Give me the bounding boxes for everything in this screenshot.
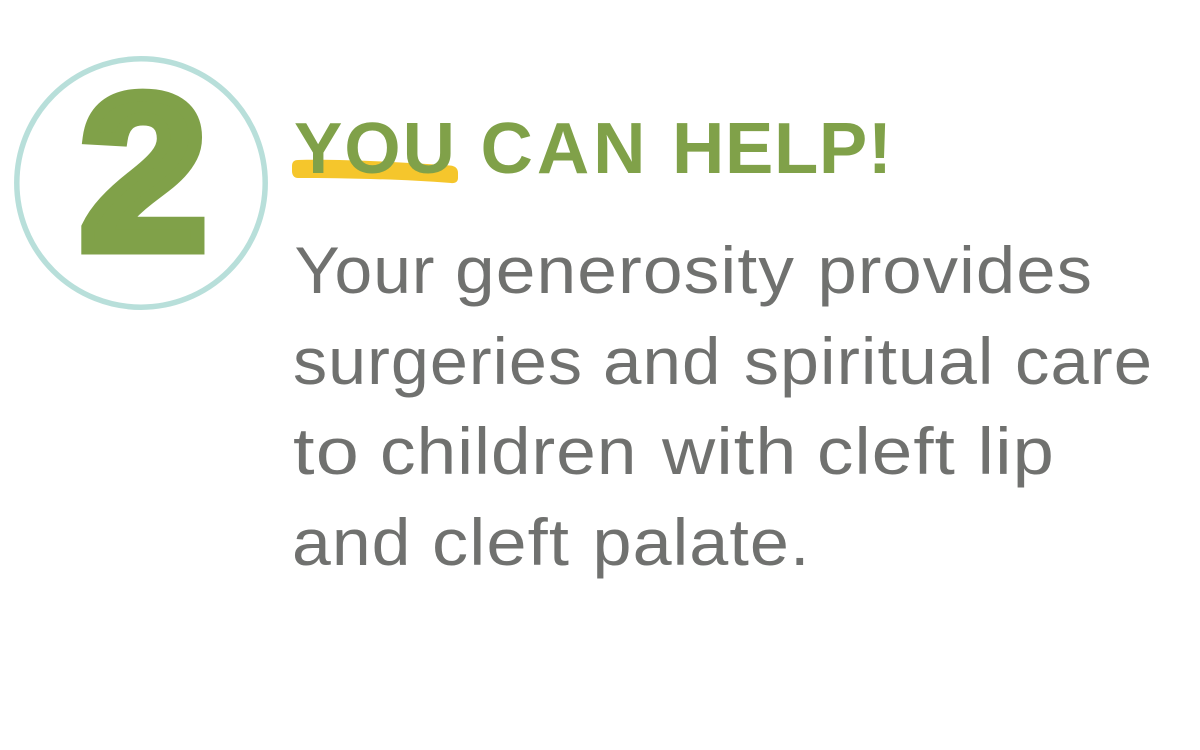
line 4: palate. xyxy=(592,505,810,579)
line 1: provides xyxy=(818,233,1093,307)
line 1: Your xyxy=(294,233,436,307)
line 3: children xyxy=(380,414,638,488)
heading text xyxy=(294,108,892,189)
line 1 xyxy=(294,233,1093,307)
line 3: with xyxy=(661,414,798,488)
line 2 xyxy=(293,324,1153,398)
number badge xyxy=(17,51,265,307)
line 1: generosity xyxy=(455,233,795,307)
yellow underline swoosh xyxy=(292,160,458,183)
line 2: and xyxy=(603,324,722,398)
line 3: to xyxy=(293,414,360,488)
heading text: YOU xyxy=(294,108,455,189)
numeral 2: 2 xyxy=(80,51,207,295)
line 4: and xyxy=(292,505,412,579)
line 4 xyxy=(292,505,810,579)
line 3: cleft xyxy=(817,414,956,488)
heading text: CAN xyxy=(480,108,646,189)
line 3: lip xyxy=(978,414,1055,488)
body text xyxy=(292,233,1153,579)
badge ring xyxy=(17,59,265,307)
heading with highlight xyxy=(292,108,892,189)
heading text: HELP! xyxy=(672,108,892,189)
line 4: cleft xyxy=(432,505,570,579)
line 2: care xyxy=(1015,324,1153,398)
line 2: surgeries xyxy=(293,324,583,398)
line 3 xyxy=(293,414,1055,488)
line 2: spiritual xyxy=(744,324,994,398)
